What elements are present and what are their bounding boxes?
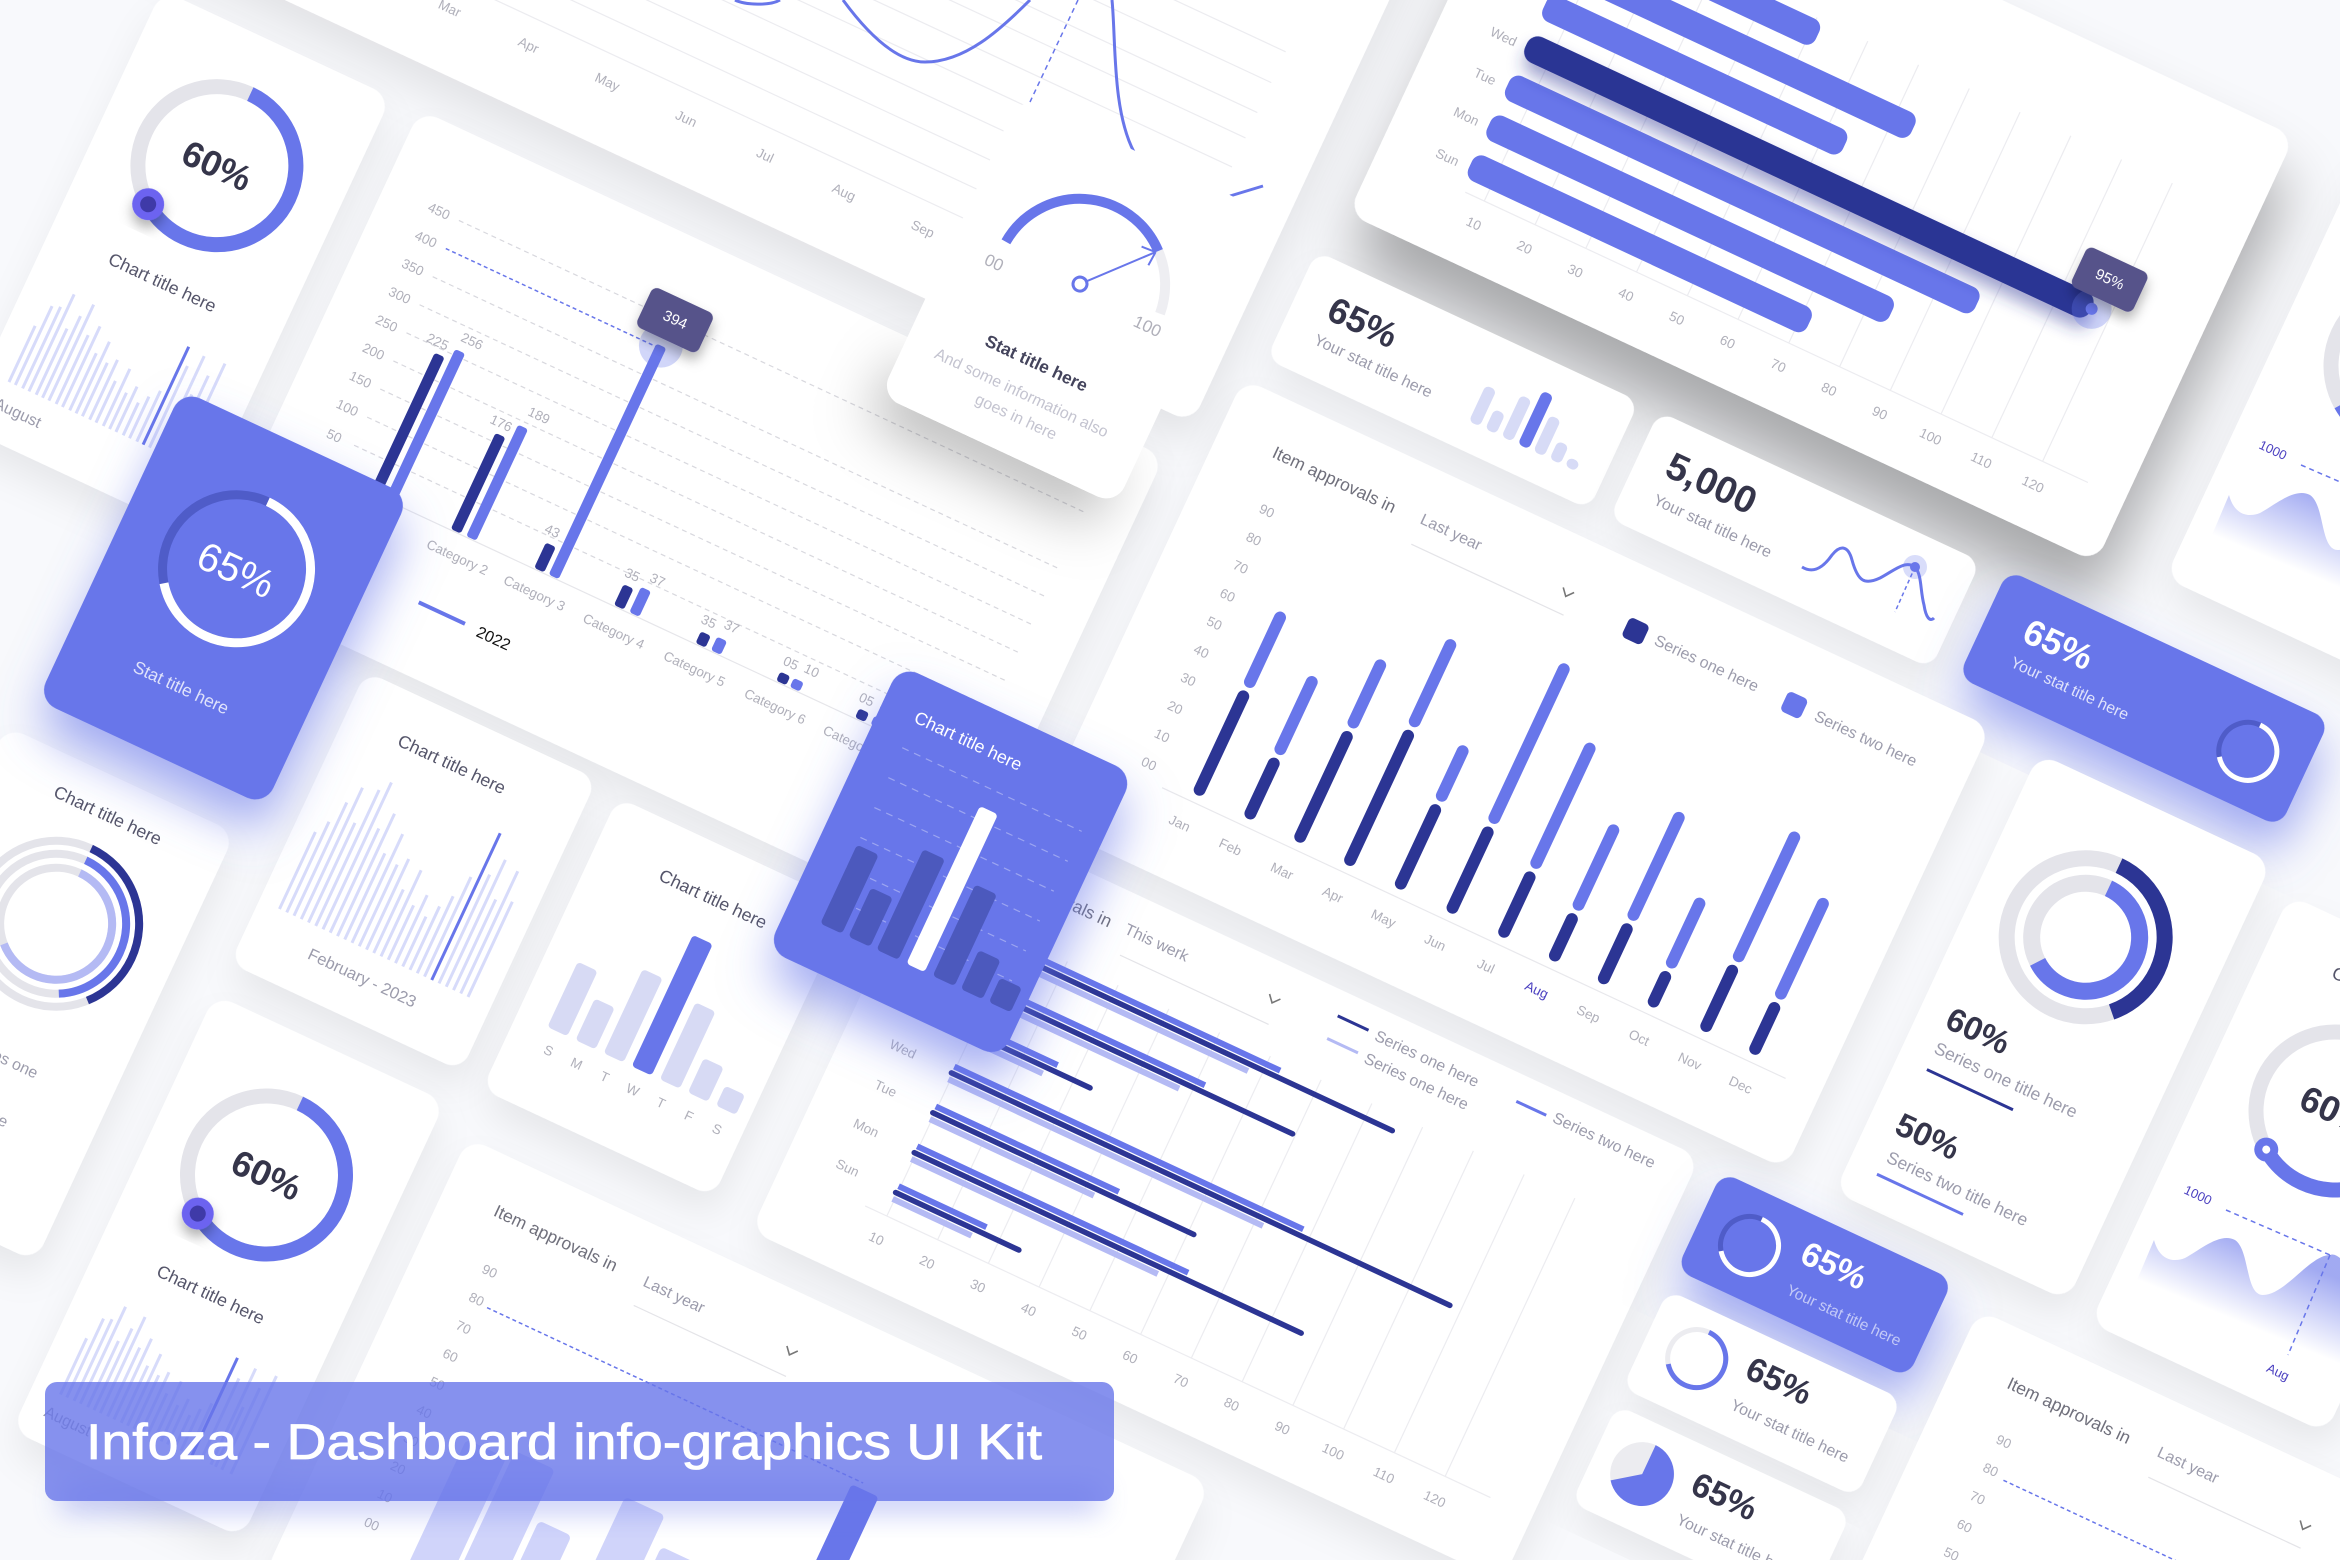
category labels: Category 6	[742, 686, 808, 727]
y axis labels: 40	[414, 1402, 434, 1422]
ring	[2209, 713, 2286, 790]
y axis labels: 80	[1981, 1460, 2001, 1480]
month labels: Dec	[1727, 1073, 1755, 1097]
highlighted bar	[1520, 32, 2098, 322]
dropdown: Last year	[1417, 511, 1485, 555]
panel: blue stat small: Your stat title here	[1784, 1282, 1904, 1350]
heading: Item approvals in	[985, 857, 1115, 931]
y axis labels: 00	[1139, 754, 1159, 774]
x axis labels: 90	[1272, 1418, 1292, 1438]
x axis labels: 20	[917, 1252, 937, 1272]
ring	[1658, 1320, 1735, 1397]
legend	[1323, 1009, 1658, 1196]
x axis labels: 60	[1718, 332, 1737, 352]
category labels: Category 3	[501, 573, 567, 614]
pie	[1600, 1432, 1685, 1517]
panel: horizontal bar chart top right	[1348, 0, 2295, 562]
month labels: Oct	[1626, 1026, 1652, 1049]
x axis labels: 70	[1171, 1371, 1191, 1391]
x axis labels: 100	[1917, 425, 1944, 448]
category labels: Category 4	[581, 611, 647, 652]
panel: weekly bars: Chart title here	[656, 865, 770, 933]
y axis labels: 10	[1152, 726, 1172, 746]
y axis labels: 450	[426, 200, 452, 223]
gauge: 100	[1130, 312, 1164, 341]
panel: stat card 5,000	[1609, 411, 1981, 668]
panel: blue stat small	[1676, 1172, 1953, 1378]
panel: stat gauge	[880, 97, 1255, 505]
panel: stat card with bars: Your stat title here	[1311, 332, 1435, 402]
stat one: Series one title here	[1931, 1038, 2081, 1122]
legend text	[0, 1035, 40, 1134]
legend: Series two here	[1550, 1110, 1658, 1172]
legend: Series one here	[1361, 1051, 1471, 1114]
bars	[379, 1329, 879, 1560]
x axis labels: 30	[968, 1276, 988, 1296]
value labels	[364, 317, 963, 719]
ring	[1711, 1207, 1788, 1284]
value labels: 256	[459, 330, 485, 353]
y axis labels: 50	[427, 1374, 447, 1394]
y axis labels	[1941, 1432, 2014, 1560]
stat one: 60%	[1940, 1000, 2016, 1061]
panel: white stat small pie: 65%	[1685, 1465, 1763, 1529]
day labels	[832, 1037, 919, 1181]
value labels: 35	[699, 612, 719, 632]
legend: Series one here	[1372, 1028, 1481, 1091]
tooltip 394	[635, 286, 715, 354]
y axis labels: 50	[1204, 613, 1224, 633]
day labels: T	[598, 1068, 612, 1085]
y axis labels	[321, 200, 452, 447]
y axis labels: 60	[440, 1346, 460, 1366]
ring 60%	[161, 1070, 371, 1281]
month labels	[1167, 812, 1755, 1097]
blue bars	[899, 945, 1360, 1349]
y axis labels: 60	[1218, 585, 1237, 605]
panel: stat card with bars: 65%	[1321, 288, 1404, 356]
y axis labels: 20	[1165, 698, 1185, 718]
stat description: And some information also	[932, 346, 1111, 441]
month labels: Feb	[1217, 835, 1244, 859]
panel: white stat small ring: 65%	[1740, 1350, 1818, 1413]
y axis labels: 70	[453, 1318, 473, 1337]
panel: item approvals bottom right	[1775, 1310, 2340, 1560]
legend 2022	[414, 596, 513, 654]
y axis labels: 80	[467, 1289, 486, 1309]
day labels: S	[541, 1042, 556, 1059]
day labels: F	[682, 1108, 696, 1125]
title banner	[45, 1382, 1114, 1501]
x axis labels: 50	[1069, 1323, 1089, 1343]
month axis labels: Jul	[754, 145, 776, 166]
legend	[1621, 617, 1921, 772]
panel: blue stat small: 65%	[1795, 1234, 1873, 1298]
day labels: W	[624, 1080, 642, 1100]
tooltip 394: 394	[660, 307, 690, 333]
dropdown: Last year	[2154, 1444, 2222, 1488]
dropdown: Last year	[640, 1274, 708, 1317]
x axis labels	[866, 1229, 1448, 1511]
x axis labels: 40	[1019, 1300, 1039, 1320]
legend: Series two here	[1811, 708, 1919, 771]
gauge	[981, 166, 1200, 347]
panel: weekly bars	[482, 797, 849, 1197]
area chart right: Aug	[2264, 1360, 2292, 1384]
month labels: Jun	[1422, 931, 1448, 954]
month axis labels: Aug	[830, 180, 858, 204]
panel: item approvals bottom left: Item approvals in	[491, 1201, 621, 1276]
mini bars	[9, 284, 225, 462]
stat card bottom shadow	[884, 333, 1140, 502]
month axis labels: May	[593, 70, 622, 94]
x axis labels: 30	[1565, 261, 1585, 281]
ring right	[2230, 1006, 2340, 1216]
dark bars	[896, 951, 1506, 1425]
area chart right	[2120, 1182, 2340, 1420]
mini bars	[1469, 368, 1601, 471]
panel: ring and area card right	[2090, 895, 2340, 1433]
category labels: Category 7	[821, 723, 887, 764]
panel: thin horizontal bars	[751, 807, 1700, 1560]
x axis labels: 110	[1968, 449, 1994, 472]
day labels: Tue	[1471, 65, 1498, 88]
day labels: Mon	[1451, 104, 1481, 129]
day labels: T	[654, 1095, 668, 1112]
bars	[547, 896, 797, 1115]
y axis labels: 30	[1178, 670, 1198, 690]
day labels: Sun	[833, 1156, 862, 1180]
legend 2022: 2022	[473, 624, 513, 654]
y axis labels: 70	[1231, 557, 1251, 577]
panel: blue stat card right: 65%	[2017, 610, 2100, 678]
x axis labels: 120	[2020, 473, 2046, 496]
value labels: 35	[622, 565, 642, 585]
dropdown	[633, 1274, 801, 1376]
month axis labels	[436, 0, 937, 241]
area chart right: 1000	[2182, 1182, 2214, 1208]
panel: ring card lower left	[12, 994, 445, 1538]
series two bars	[1218, 551, 1866, 1010]
y axis labels: 30	[401, 1430, 421, 1450]
panel: blue bar chart card: Chart title here	[911, 707, 1025, 775]
panel: stat card 5,000: 5,000	[1659, 445, 1763, 523]
y axis labels: 90	[1994, 1432, 2014, 1452]
x axis labels: 100	[1320, 1440, 1346, 1463]
panel: triple ring	[0, 726, 235, 1262]
rings	[0, 813, 166, 1034]
panel: category bar chart	[201, 110, 1164, 926]
panel: february thin bars	[230, 671, 597, 1071]
panel: blue stat card right: Your stat title here	[2008, 654, 2131, 724]
month labels: Jul	[1475, 956, 1497, 977]
y axis labels: 00	[362, 1514, 382, 1534]
month axis labels: Apr	[516, 34, 542, 57]
legend: Series one here	[1651, 633, 1761, 696]
category labels: Category 5	[661, 648, 727, 690]
stat two	[1874, 1105, 2050, 1240]
panel: white stat small ring	[1622, 1290, 1902, 1497]
day labels	[1432, 24, 1519, 170]
value labels: 225	[424, 330, 451, 353]
day labels: Wed	[887, 1037, 919, 1062]
panel: ring and area card top right	[2165, 150, 2340, 688]
category labels	[424, 537, 887, 764]
panel: item approvals bottom left	[264, 1138, 1210, 1560]
panel: double ring	[1834, 753, 2272, 1301]
panel: triple ring: Chart title here	[51, 782, 165, 849]
panel: february thin bars: February - 2023	[305, 945, 419, 1011]
value labels: 05	[857, 690, 877, 710]
value labels: 05	[781, 653, 801, 673]
month axis labels: Sep	[909, 217, 937, 241]
panel: white stat small pie	[1571, 1405, 1851, 1560]
stat two: 50%	[1890, 1105, 1966, 1167]
x axis labels: 50	[1667, 308, 1687, 328]
x axis labels: 120	[1421, 1487, 1448, 1511]
x axis labels: 110	[1371, 1464, 1397, 1487]
month labels: Aug	[1523, 978, 1551, 1002]
dropdown	[1114, 921, 1283, 1024]
month labels: Apr	[1320, 884, 1346, 906]
ring 60%	[111, 61, 322, 272]
ring 65%	[138, 470, 335, 667]
title banner: Infoza - Dashboard info-graphics UI Kit	[86, 1414, 1042, 1470]
day labels: Tue	[872, 1077, 899, 1100]
panel: blue ring card: Stat title here	[130, 657, 232, 718]
y axis labels	[1139, 501, 1277, 774]
panel: blue ring card	[37, 390, 409, 806]
y axis labels: 300	[386, 284, 413, 307]
value labels: 43	[542, 521, 562, 541]
panel: ring card lower left: August	[41, 1404, 94, 1441]
dropdown	[2147, 1444, 2316, 1548]
month labels: Sep	[1574, 1002, 1602, 1026]
ring 60%: 60%	[225, 1141, 308, 1209]
x axis labels: 20	[1514, 237, 1534, 257]
month labels: Nov	[1676, 1049, 1704, 1073]
value marker	[2065, 282, 2118, 335]
value labels: 37	[648, 570, 667, 590]
x axis labels: 70	[1768, 356, 1788, 376]
y axis labels: 100	[334, 396, 361, 419]
y axis labels	[362, 1261, 500, 1534]
ring 65%: 65%	[190, 534, 281, 607]
x axis labels: 80	[1222, 1394, 1242, 1414]
stat title: Stat title here	[982, 331, 1091, 396]
rings	[1981, 832, 2191, 1042]
value labels: 176	[488, 412, 514, 435]
mini bars	[60, 1297, 276, 1474]
thin bars	[279, 762, 536, 997]
y axis labels: 10	[375, 1486, 395, 1506]
tooltip 95%	[2070, 245, 2150, 314]
panel: stat card with bars	[1266, 251, 1639, 509]
bars dark	[370, 353, 930, 722]
ring 60%: 60%	[176, 132, 258, 199]
y axis labels: 20	[388, 1458, 408, 1478]
day labels	[541, 1042, 724, 1138]
day labels: Sun	[1433, 145, 1461, 169]
value labels: 189	[526, 404, 552, 427]
day labels: M	[568, 1055, 585, 1073]
y axis labels: 150	[347, 368, 374, 391]
banner shadow	[60, 1486, 1100, 1512]
stat description: goes in here	[972, 391, 1059, 444]
line chart curve	[735, 0, 1263, 196]
y axis labels: 90	[1257, 501, 1277, 521]
panel: february thin bars: Chart title here	[395, 731, 509, 798]
stat one	[1924, 1000, 2098, 1135]
panel: blue stat card right	[1958, 570, 2330, 827]
value labels: 37	[722, 617, 742, 637]
gauge: 00	[981, 250, 1007, 275]
sparkline	[1802, 548, 1934, 619]
y axis labels: 400	[412, 228, 439, 251]
tooltip 95%: 95%	[2092, 266, 2127, 294]
chart title: Chart title here	[105, 249, 220, 316]
category labels: Category 2	[424, 537, 490, 578]
dropdown	[1410, 511, 1579, 615]
stat two: Series two title here	[1884, 1147, 2031, 1230]
y axis labels: 80	[1244, 529, 1264, 549]
x axis labels: 10	[1464, 214, 1484, 234]
bars	[820, 766, 1084, 1012]
panel: blue bar chart card	[767, 665, 1134, 1059]
panel: line chart top	[150, 0, 1513, 423]
y axis labels: 50	[324, 426, 344, 446]
y axis labels: 350	[399, 256, 426, 279]
month labels: Jan	[1167, 812, 1193, 835]
day labels: S	[710, 1121, 724, 1138]
value labels: 10	[802, 661, 822, 681]
area chart top right	[2195, 437, 2340, 675]
x axis labels	[1464, 214, 2046, 496]
value labels: 10	[878, 696, 898, 716]
heading: Item approvals in	[1269, 442, 1399, 517]
panel: ring card lower left: Chart title here	[154, 1261, 268, 1328]
bars	[1464, 0, 2057, 396]
month axis labels: Jun	[673, 107, 699, 130]
dropdown: This werk	[1122, 921, 1192, 966]
y axis labels: 40	[1191, 642, 1211, 661]
x axis labels: 40	[1616, 285, 1636, 305]
y axis labels: 70	[1968, 1488, 1988, 1508]
y axis labels: 200	[360, 340, 387, 363]
panel: white stat small ring: Your stat title here	[1728, 1397, 1851, 1467]
ring top right	[2305, 261, 2340, 471]
series one bars	[1200, 666, 1813, 1049]
area chart top right: 1000	[2257, 437, 2289, 463]
y axis labels: 90	[480, 1261, 500, 1281]
month labels: Mar	[1268, 859, 1296, 883]
panel: item approvals chart	[1038, 379, 1991, 1169]
x axis labels: 10	[866, 1229, 886, 1249]
x axis labels: 90	[1870, 403, 1890, 423]
x axis labels: 80	[1819, 379, 1839, 399]
month labels: May	[1369, 906, 1398, 931]
day labels: Mon	[851, 1116, 881, 1140]
day labels: Wed	[1488, 24, 1519, 49]
panel: item approvals bottom right: Item approvals in	[2004, 1373, 2134, 1448]
panel: stat card 5,000: Your stat title here	[1651, 492, 1774, 562]
y axis labels: 250	[373, 312, 400, 335]
y axis labels: 60	[1954, 1516, 1974, 1536]
light bars	[893, 958, 1320, 1346]
panel: ring card top left	[0, 0, 391, 532]
bars blue	[386, 247, 997, 729]
x axis labels: 60	[1120, 1347, 1140, 1367]
